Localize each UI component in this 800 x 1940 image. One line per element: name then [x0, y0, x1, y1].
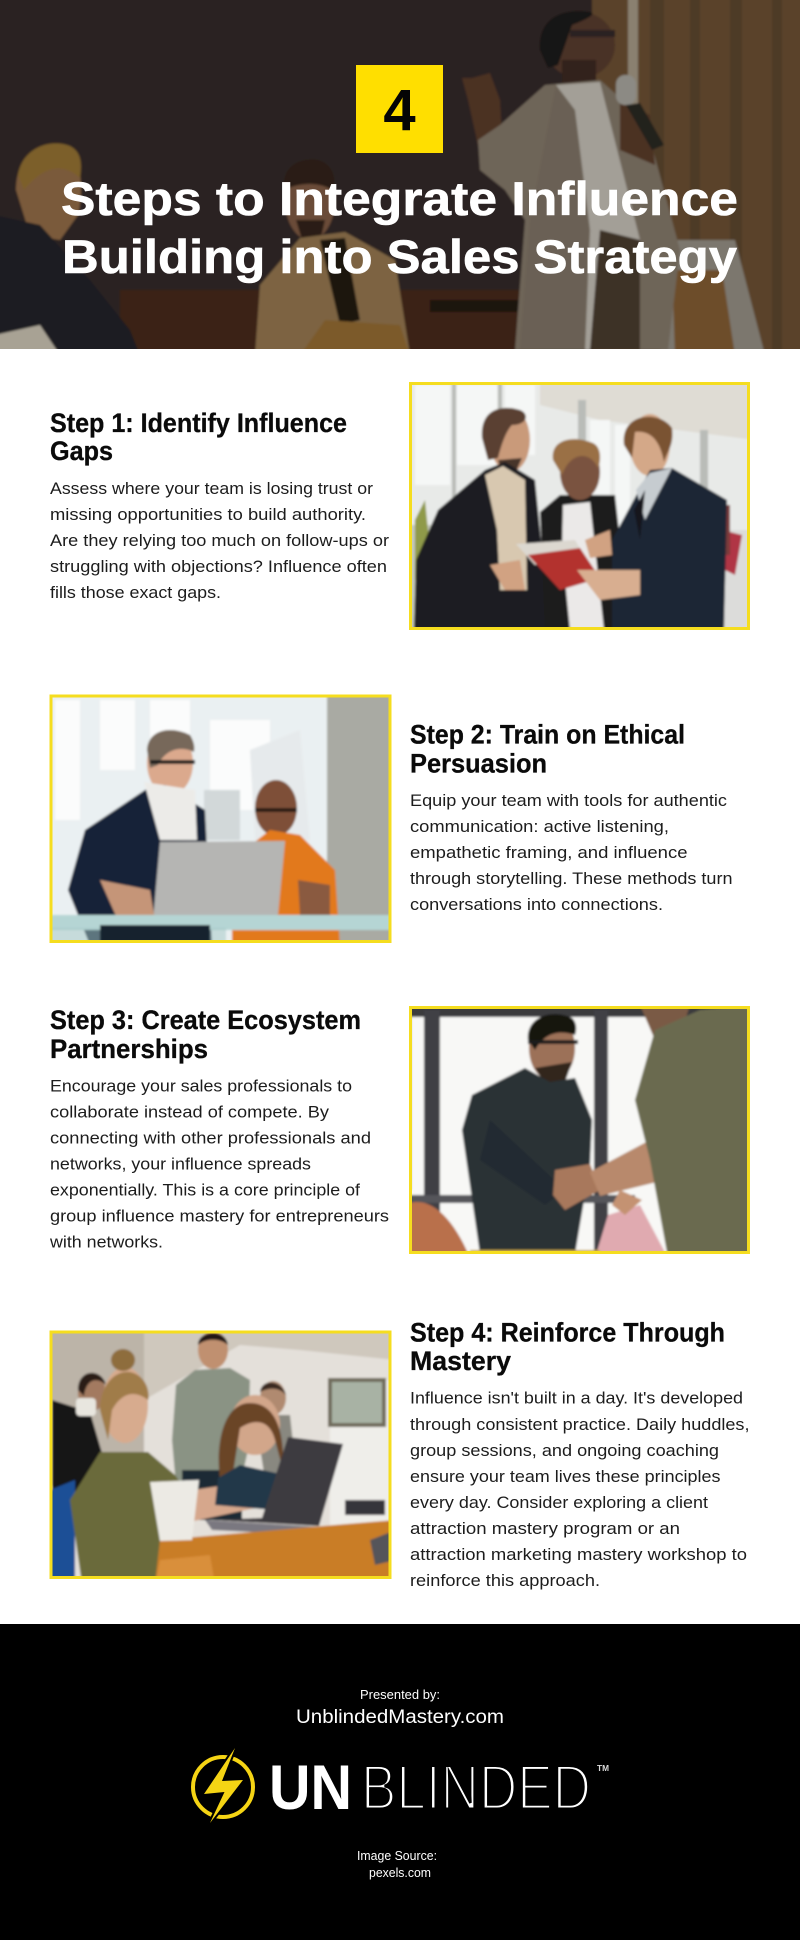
number badge: [356, 65, 443, 153]
step 1 photo: three colleagues reviewing a red folder: [405, 378, 755, 634]
step 1 text: struggling with objections? Influence often: [50, 557, 387, 576]
wordmark: BLINDED: [361, 1753, 591, 1823]
step 1 heading: [50, 408, 347, 466]
step 4 text: ensure your team lives these principles: [410, 1467, 720, 1486]
step 2 text: conversations into connections.: [410, 895, 663, 914]
step 1 text: fills those exact gaps.: [50, 583, 221, 602]
step 3 text: group influence mastery for entrepreneurs: [50, 1206, 389, 1226]
website: UnblindedMastery.com: [296, 1707, 504, 1728]
step 4 text: attraction marketing mastery workshop to: [410, 1545, 747, 1564]
step 4 text: Influence isn't built in a day. It's developed: [410, 1388, 743, 1408]
step 1 text: missing opportunities to build authority.: [50, 505, 366, 524]
step 4 text: every day. Consider exploring a client: [410, 1493, 708, 1512]
step 2 heading: Step 2: Train on Ethical: [410, 720, 685, 750]
logo: Unblinded: [193, 1748, 609, 1823]
step 4 text: group sessions, and ongoing coaching: [410, 1441, 719, 1460]
wordmark: TM: [597, 1764, 609, 1773]
step 3 heading: Partnerships: [50, 1034, 208, 1064]
step 1 text: Are they relying too much on follow-ups or: [50, 531, 389, 550]
step 2 photo: two men at a laptop: [46, 690, 396, 950]
wordmark: UN: [269, 1753, 352, 1823]
title: [61, 172, 738, 283]
step 4 photo: team around a laptop: [46, 1326, 396, 1584]
step 4 text: reinforce this approach.: [410, 1571, 600, 1590]
hero banner: [0, 0, 800, 355]
step 3 text: [49, 1076, 389, 1252]
step 4 text: [410, 1388, 750, 1590]
step 3 text: collaborate instead of compete. By: [50, 1102, 330, 1122]
step 4 heading: Mastery: [410, 1346, 511, 1376]
number badge: 4: [383, 78, 416, 143]
step 1 heading: Step 1: Identify Influence: [50, 408, 347, 438]
step 3 photo: handshake: [405, 1002, 755, 1258]
panel: footer: [0, 1624, 800, 1940]
panel: step 2: [46, 690, 732, 950]
step 3 text: with networks.: [49, 1232, 163, 1252]
title: Steps to Integrate Influence: [61, 172, 738, 225]
step 4 heading: Step 4: Reinforce Through: [410, 1318, 725, 1348]
step 2 text: through storytelling. These methods turn: [410, 869, 732, 888]
panel: step 3: [49, 1002, 755, 1258]
step 2 heading: Persuasion: [410, 748, 547, 778]
step 2 text: [410, 791, 732, 914]
step 4 heading: [410, 1318, 725, 1376]
panel: step 4: [46, 1318, 750, 1590]
step 4 text: attraction mastery program or an: [410, 1519, 680, 1538]
step 2 text: Equip your team with tools for authentic: [410, 791, 728, 810]
step 1 text: [50, 479, 389, 602]
step 3 heading: [50, 1005, 361, 1064]
step 3 text: exponentially. This is a core principle of: [50, 1180, 360, 1200]
step 3 text: networks, your influence spreads: [50, 1154, 311, 1174]
step 3 text: connecting with other professionals and: [50, 1128, 371, 1148]
step 4 text: through consistent practice. Daily huddles,: [410, 1415, 750, 1434]
image source: pexels.com: [369, 1866, 431, 1880]
step 3 text: Encourage your sales professionals to: [50, 1076, 352, 1096]
step 1 text: Assess where your team is losing trust or: [50, 479, 373, 498]
presented by: Presented by:: [360, 1687, 440, 1702]
image source: Image Source:: [357, 1849, 437, 1863]
panel: step 1: [50, 378, 755, 634]
icon: lightning bolt in circle: [193, 1748, 253, 1823]
wordmark: [269, 1753, 609, 1823]
title: Building into Sales Strategy: [62, 230, 737, 283]
step 2 heading: [410, 720, 685, 778]
step 3 heading: Step 3: Create Ecosystem: [50, 1005, 361, 1035]
image source: [357, 1849, 437, 1880]
step 2 text: communication: active listening,: [410, 817, 669, 836]
step 1 heading: Gaps: [50, 436, 113, 466]
step 2 text: empathetic framing, and influence: [410, 843, 688, 862]
hero photo: speaker and seated audience: [0, 0, 800, 355]
